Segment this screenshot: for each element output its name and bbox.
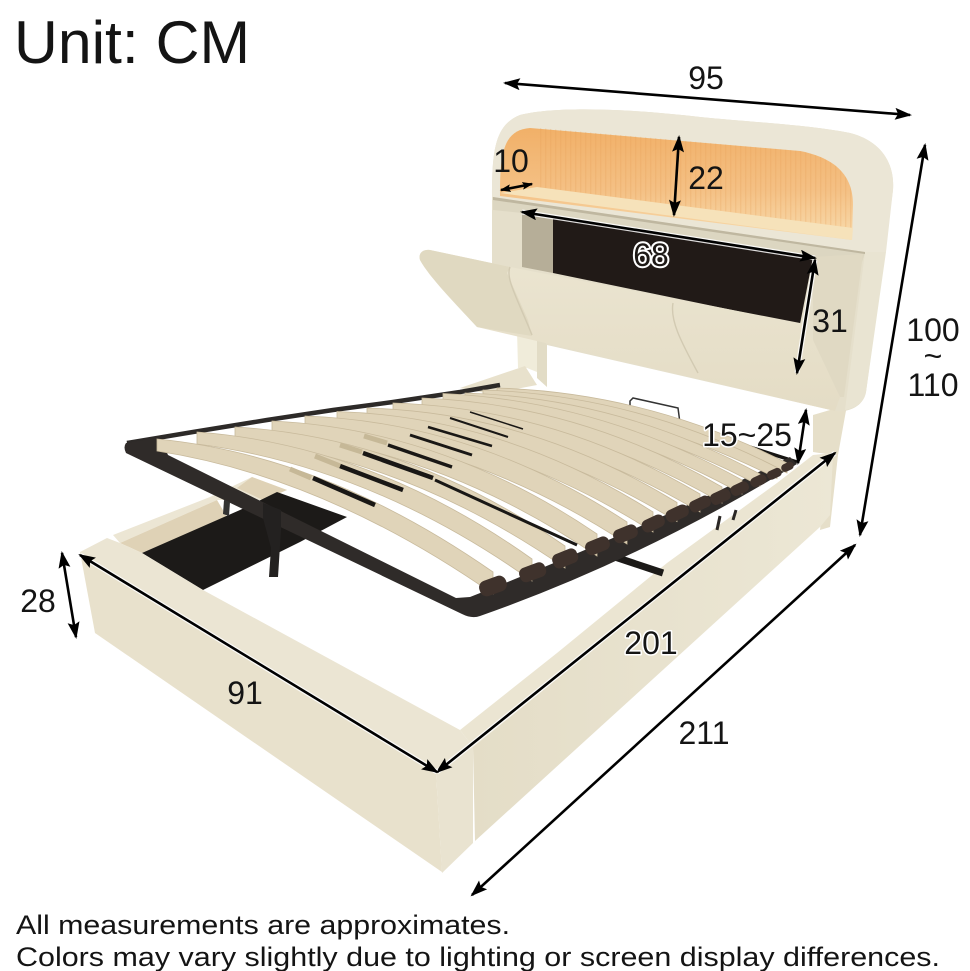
- dimension: niche height 22: [674, 137, 724, 215]
- storage base: [80, 405, 847, 873]
- tan slat patches: [290, 436, 387, 478]
- dimension: headboard clearance 15~25: 15~25: [702, 417, 792, 453]
- metal frame: [124, 437, 797, 617]
- dark slat gaps: [313, 412, 577, 545]
- dimension: total height 100~110: 100: [906, 312, 960, 348]
- right rail side: [473, 455, 833, 841]
- thin rear line: [600, 417, 667, 438]
- dimension: total height 100~110: [860, 145, 960, 535]
- slatted lift frame: [124, 385, 797, 617]
- dimension: rail height 28: 28: [20, 583, 56, 619]
- niche shelf: [500, 187, 853, 240]
- dimension: inner width 91: [80, 555, 437, 772]
- bed illustration: [80, 109, 893, 873]
- slat end caps: [477, 460, 795, 598]
- shelf edge: [493, 197, 865, 254]
- door creases: [509, 267, 698, 373]
- rear metal bar: [737, 443, 797, 462]
- band below shelf: [493, 199, 865, 262]
- dimension: niche depth 10: 10: [493, 143, 529, 179]
- frame hinge: [263, 503, 281, 577]
- footnote: All measurements are approximates.: [16, 910, 510, 940]
- right side fold: [813, 254, 863, 397]
- dimension: rail height 28: [20, 553, 76, 637]
- back rail stub: [460, 366, 537, 394]
- lift handle: [630, 398, 680, 423]
- front rail face: [80, 552, 442, 872]
- dimension: inner length 201: 201: [624, 625, 678, 661]
- dimension: total length 211: [472, 545, 855, 895]
- dimension: headboard width 95: 95: [688, 60, 724, 96]
- dimension: niche height 22: 22: [688, 160, 724, 196]
- dimension: total length 211: 211: [678, 715, 730, 751]
- niche ribs: [537, 128, 853, 228]
- back rail top: [113, 477, 287, 543]
- front rail top: [80, 538, 473, 773]
- lit niche: [500, 128, 853, 240]
- headboard: [420, 109, 893, 411]
- right rim: [845, 252, 886, 410]
- upper rim: [492, 109, 893, 252]
- title: Unit: CM: [14, 9, 250, 76]
- dimension: headboard width 95: [505, 60, 910, 115]
- slats: [157, 388, 787, 594]
- right rail top: [460, 453, 833, 747]
- rail inner face rear: [237, 477, 287, 500]
- dimension: inner length 201: [437, 453, 835, 772]
- left post: [460, 330, 547, 394]
- compartment dark back: [553, 218, 813, 324]
- rail inner face: [120, 500, 227, 553]
- footnote: [16, 910, 940, 971]
- corner end: [436, 745, 473, 873]
- dimension: total height 100~110: 110: [907, 367, 959, 403]
- dimension: inner width 91: 91: [227, 675, 263, 711]
- lower legs: [717, 510, 736, 530]
- headboard body: [492, 109, 893, 411]
- dimension: compartment height 31: 31: [812, 303, 848, 339]
- fold-down door: [420, 250, 840, 411]
- dimension: compartment width 68: 68: [633, 237, 669, 273]
- support bars: [615, 557, 663, 573]
- dimension: compartment width 68: [522, 212, 815, 273]
- storage floor: [142, 492, 347, 590]
- rear right post: [813, 405, 847, 530]
- dimension: headboard clearance 15~25: [702, 410, 806, 463]
- dimension: compartment height 31: [797, 260, 848, 373]
- compartment side: [522, 213, 553, 273]
- dimension: total height 100~110: ~: [924, 338, 942, 374]
- frame bracket: [223, 500, 230, 516]
- metal back edge: [127, 385, 500, 443]
- door left panel: [420, 250, 532, 336]
